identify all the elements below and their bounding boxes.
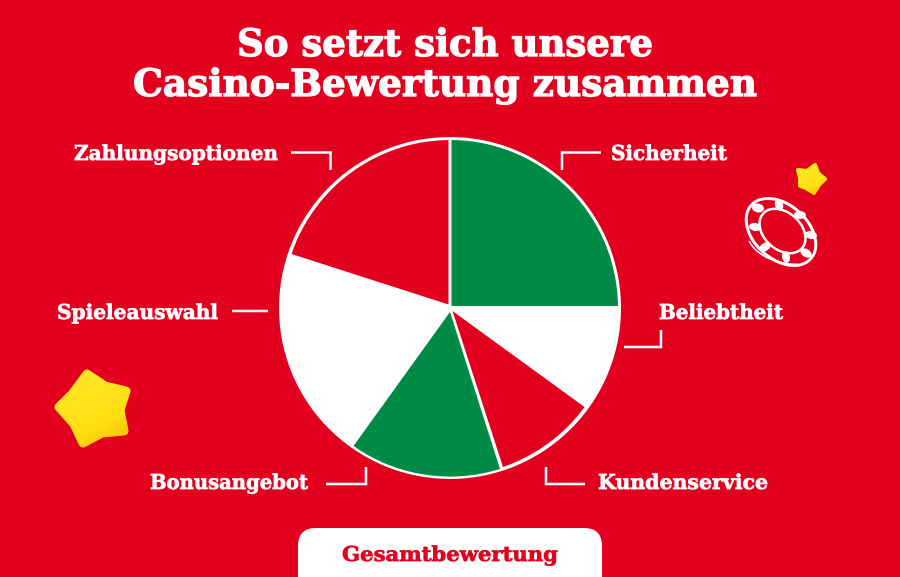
icon: casino chip [733, 185, 829, 279]
title [133, 21, 757, 105]
icon: large star [59, 374, 126, 443]
slice: Zahlungsoptionen [292, 140, 448, 304]
slice: Kundenservice [452, 311, 584, 467]
label: Spieleauswahl: Spieleauswahl [57, 300, 218, 324]
label: Zahlungsoptionen: Zahlungsoptionen [74, 141, 278, 165]
label: Bonusangebot [150, 467, 366, 494]
slice: Bonusangebot [354, 312, 500, 477]
title: So setzt sich unsere [237, 21, 653, 65]
pie base disc [279, 137, 621, 479]
label: Sicherheit [562, 141, 728, 170]
label: Zahlungsoptionen [74, 141, 330, 170]
icon: small star [798, 165, 825, 193]
slice: Sicherheit [452, 140, 618, 306]
label: Beliebtheit [624, 300, 784, 347]
label: Beliebtheit: Beliebtheit [659, 300, 784, 324]
label: Kundenservice: Kundenservice [598, 470, 768, 494]
title: Casino-Bewertung zusammen [133, 61, 757, 105]
label: Kundenservice [546, 467, 768, 494]
button: Gesamtbewertung: Gesamtbewertung [342, 542, 558, 566]
label: Bonusangebot: Bonusangebot [150, 470, 308, 494]
pie chart [279, 137, 621, 479]
label: Sicherheit: Sicherheit [611, 141, 728, 165]
button: Gesamtbewertung [298, 528, 602, 577]
